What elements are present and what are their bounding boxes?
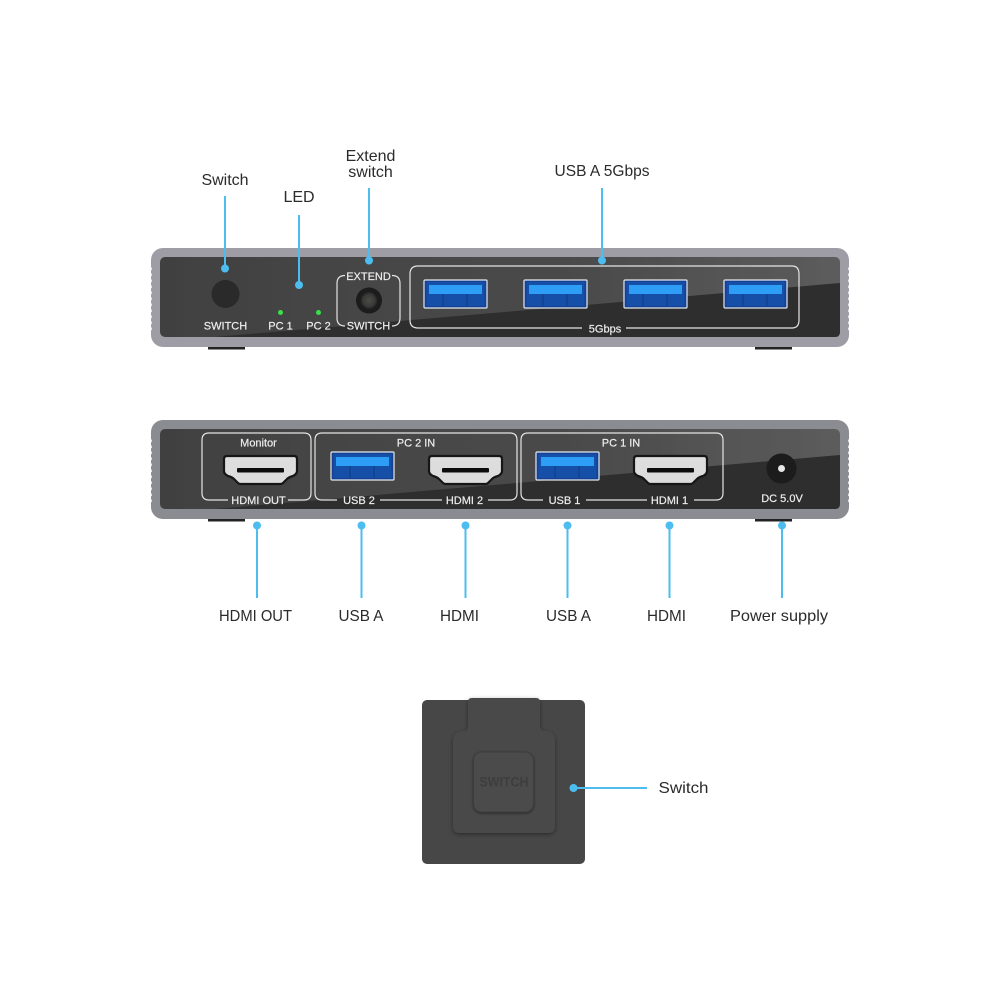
extend switch xyxy=(337,271,400,332)
monitor output group xyxy=(202,433,311,507)
callout: HDMI (PC 2): HDMI xyxy=(440,608,479,625)
PC 1 input group: HDMI 1 xyxy=(651,495,688,507)
remote switch puck xyxy=(422,698,585,864)
PC 1 input group xyxy=(521,433,723,507)
callout: USB A 5Gbps: USB A 5Gbps xyxy=(554,163,650,180)
LED indicators: PC 1 xyxy=(268,320,293,332)
callout: HDMI OUT: HDMI OUT xyxy=(219,608,292,625)
monitor output group: HDMI OUT xyxy=(231,495,286,507)
USB A ports group xyxy=(410,266,799,336)
PC 1 input group: PC 1 IN xyxy=(602,438,640,450)
callout: USB A 5Gbps xyxy=(554,163,650,264)
callout: HDMI OUT xyxy=(219,522,292,625)
callout: Power supply: Power supply xyxy=(730,608,828,625)
LED indicators xyxy=(268,310,331,332)
callout: HDMI (PC 1) xyxy=(647,522,686,625)
switch button xyxy=(204,280,247,332)
callout: HDMI (PC 2) xyxy=(440,522,479,625)
switch key: SWITCH xyxy=(480,774,528,790)
callout: USB A (PC 1): USB A xyxy=(546,608,591,625)
PC 2 input group: PC 2 IN xyxy=(397,438,435,450)
callout: Extend switch xyxy=(346,148,395,264)
callout: LED xyxy=(283,189,315,289)
PC 1 input group: USB 1 xyxy=(549,495,580,507)
callout: Switch xyxy=(201,172,249,272)
power jack: DC 5.0V xyxy=(761,493,803,505)
LED indicators: PC 2 xyxy=(306,320,331,332)
callout: LED: LED xyxy=(283,189,315,206)
device: back panel xyxy=(151,420,849,522)
power jack xyxy=(761,454,803,505)
extend switch: SWITCH xyxy=(347,320,390,332)
callout: Power supply xyxy=(730,522,828,625)
monitor output group: Monitor xyxy=(240,438,277,450)
callout: HDMI (PC 1): HDMI xyxy=(647,608,686,625)
callout: remote Switch xyxy=(570,780,708,797)
PC 2 input group: HDMI 2 xyxy=(446,495,483,507)
callout: remote Switch: Switch xyxy=(658,780,708,797)
device: front panel xyxy=(151,248,849,350)
callout: Switch: Switch xyxy=(201,172,249,189)
callout: Extend switch: switch xyxy=(348,164,393,181)
callout: USB A (PC 1) xyxy=(546,522,591,625)
callout: Extend switch: Extend xyxy=(346,148,395,165)
switch button: SWITCH xyxy=(204,320,247,332)
callout: USB A (PC 2) xyxy=(338,522,384,625)
PC 2 input group: USB 2 xyxy=(343,495,375,507)
USB A ports group: 5Gbps xyxy=(589,324,622,336)
extend switch: EXTEND xyxy=(346,271,391,283)
switch key xyxy=(474,752,534,812)
PC 2 input group xyxy=(315,433,517,507)
callout: USB A (PC 2): USB A xyxy=(338,608,384,625)
